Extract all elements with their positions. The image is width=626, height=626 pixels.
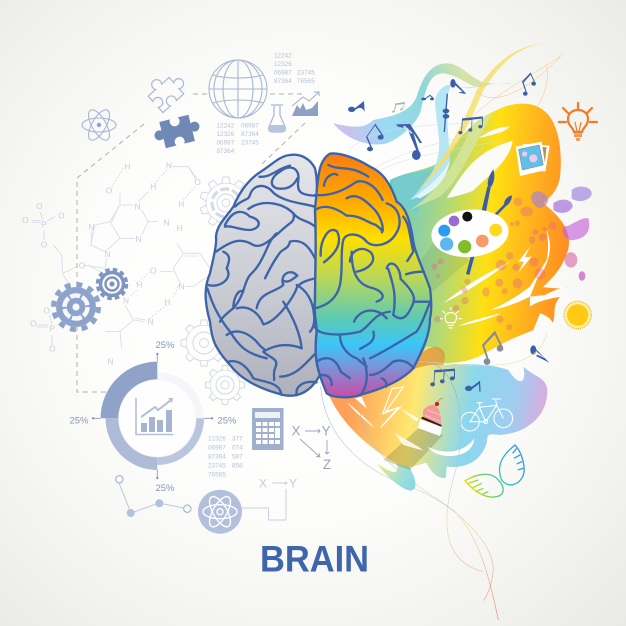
chemical structure: O <box>36 201 43 211</box>
chemical structure: N <box>104 249 110 259</box>
chemical structure: N <box>166 160 172 170</box>
chemical structure: N <box>108 356 114 366</box>
number block: by donut: 23745 <box>208 462 226 469</box>
icon: cupcake <box>418 398 443 436</box>
chemical structure: N <box>135 234 141 244</box>
number block: below globe <box>216 122 259 155</box>
paint splats <box>431 197 557 330</box>
chemical structure: N <box>148 317 154 327</box>
colour splash: upper <box>333 43 597 363</box>
chemical structure: H <box>150 181 156 191</box>
number block: below globe: 12242 <box>216 122 235 130</box>
chemical structure: O <box>150 265 157 275</box>
number block: by donut: 074 <box>232 444 243 452</box>
chemical structure: O <box>43 305 50 315</box>
number block: by donut: 377 <box>232 436 243 442</box>
percent labels: 25% <box>217 416 237 426</box>
donut chart <box>69 340 237 494</box>
chemical structure: N <box>123 295 129 305</box>
icon: calculator <box>252 408 284 450</box>
number block: below globe: 06987 <box>241 122 259 130</box>
left folds <box>207 166 317 395</box>
chemical structure: H <box>177 223 183 233</box>
icon: photos <box>516 142 550 176</box>
chemical structure: O <box>49 344 56 354</box>
formula: X Y Z: Y <box>321 424 331 438</box>
lower rainbow blob <box>328 347 547 478</box>
chemical structure: H <box>164 297 170 307</box>
formula: X to Y circuit <box>242 476 297 520</box>
icon: big gear <box>54 284 98 330</box>
number block: below globe: 87364 <box>216 148 235 155</box>
icon: puzzle outline <box>143 66 190 113</box>
formula: X to Y circuit: X <box>259 476 267 490</box>
number block: below globe: 23745 <box>241 140 259 146</box>
title: BRAIN <box>260 538 369 580</box>
chemical structure: H <box>124 161 130 171</box>
brain <box>206 153 431 397</box>
icon: sun <box>564 301 591 329</box>
number block: top: 06987 <box>274 70 292 76</box>
chemical structure: O <box>194 177 201 187</box>
number block: by donut: 87364 <box>208 454 226 460</box>
icon: bicycle <box>461 399 513 431</box>
percent labels: 25% <box>155 483 175 494</box>
number block: below globe: 12326 <box>216 131 235 138</box>
formula: X Y Z <box>291 424 331 472</box>
number block: top <box>274 52 315 85</box>
teal band <box>390 157 445 213</box>
network nodes <box>116 476 191 517</box>
right folds <box>315 165 430 395</box>
icon: palette and brushes <box>429 169 512 275</box>
icon: rising chart <box>292 92 319 116</box>
chemical structure: H <box>178 199 184 209</box>
right hemisphere <box>315 153 431 397</box>
main orange-teal swirl <box>390 104 569 363</box>
yellow ribbons <box>417 43 543 192</box>
notes lower <box>430 331 549 392</box>
left hemisphere <box>206 155 320 396</box>
chemical structure: O <box>22 215 29 225</box>
colour splash: lower <box>321 331 549 620</box>
formula: X Y Z: X <box>291 424 301 438</box>
number block: top: 76565 <box>297 78 315 85</box>
icon: small gear <box>98 270 126 298</box>
icon: wings <box>465 445 524 497</box>
dashed connector lines <box>77 94 305 392</box>
chemical structure: O <box>41 240 48 250</box>
blob tail <box>377 463 415 491</box>
light blue wisp <box>410 85 452 200</box>
music notes <box>348 72 536 160</box>
number block: below globe: 87364 <box>241 131 259 138</box>
formula: X to Y circuit: Y <box>289 476 297 490</box>
chemical structure: N <box>164 217 170 227</box>
percent labels: 25% <box>69 416 89 426</box>
chemical structure: O <box>58 211 65 221</box>
icon: globe <box>209 60 267 118</box>
chemical structure: H <box>136 280 142 290</box>
number block: by donut: 12326 <box>208 436 226 442</box>
number block: top: 12242 <box>274 52 292 60</box>
icon: atom <box>82 107 116 143</box>
chemical structure: O <box>30 319 37 329</box>
chemical structure: O <box>79 260 86 270</box>
number block: by donut: 858 <box>232 462 243 469</box>
number block: below globe: 06987 <box>216 140 235 146</box>
icon: small bulb <box>440 307 462 328</box>
thin flowing lines <box>321 333 547 620</box>
icon: lightning <box>381 387 403 427</box>
chemical structure: N <box>88 222 94 232</box>
number block: by donut <box>208 436 243 478</box>
number block: by donut: 587 <box>232 454 243 460</box>
bar chart inside donut <box>136 398 173 434</box>
icon: atom badge <box>198 490 242 534</box>
white streaks <box>447 141 513 198</box>
number block: by donut: 06987 <box>208 444 226 452</box>
percent labels: 25% <box>155 340 175 351</box>
white streaks <box>348 403 373 427</box>
teal stream <box>333 63 490 144</box>
chemical structure: P <box>41 219 47 229</box>
number block: by donut: 76565 <box>208 471 226 478</box>
number block: top: 87364 <box>274 78 292 85</box>
long shadow of palette <box>413 243 470 297</box>
purple splats <box>531 187 592 281</box>
chemical structure: P <box>50 324 56 334</box>
long cupcake shadow <box>383 428 443 470</box>
chemical structure: N <box>179 281 185 291</box>
number block: top: 23745 <box>297 70 315 76</box>
outline gears behind brain <box>181 177 252 404</box>
chemical structure <box>22 160 210 366</box>
number block: top: 12326 <box>274 61 292 68</box>
orange strands <box>470 53 563 130</box>
formula: X Y Z: Z <box>323 457 331 472</box>
icon: big bulb <box>559 103 597 141</box>
chemical structure: O <box>106 186 113 196</box>
icon: flask <box>269 105 285 132</box>
chemical structure: N <box>135 201 141 211</box>
percent labels <box>69 340 237 494</box>
icon: puzzle solid <box>152 113 203 150</box>
